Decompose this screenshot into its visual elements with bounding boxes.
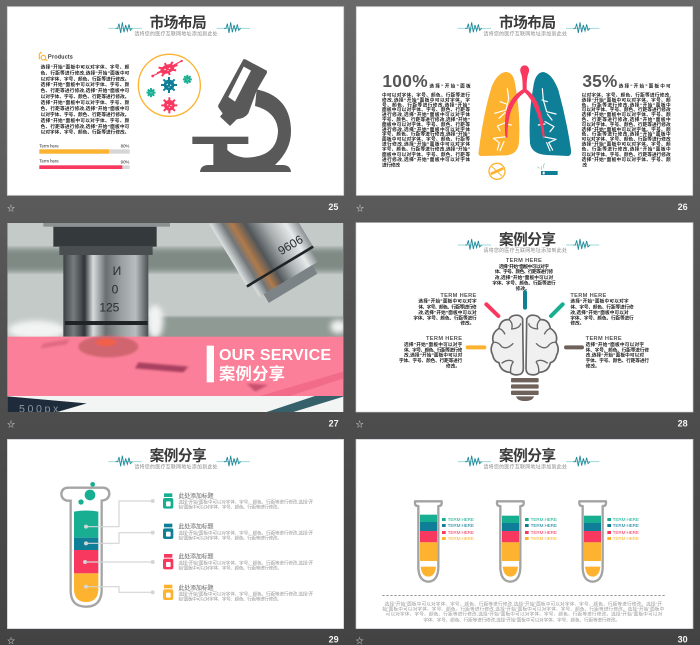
- icon: star: ☆: [356, 420, 364, 429]
- lower-right term: 体、字号、颜色、行距等进行修: [586, 346, 649, 353]
- section title: OUR SERVICE: [219, 347, 331, 364]
- tube 1 with legend: [415, 501, 474, 582]
- top term: 改,选择“开始”面板中可以对: [495, 274, 553, 281]
- upper-left term: 改,选择“开始”面板中可以对: [418, 309, 477, 316]
- left paragraph: 面板中可以对字体、字号、颜色、行距等: [382, 136, 470, 143]
- top term: TERM HERE: [506, 258, 542, 264]
- left paragraph: [382, 82, 471, 169]
- progress bar 80%: Term here: [39, 144, 59, 149]
- progress bar 80%: [39, 144, 130, 154]
- icon: star: ☆: [7, 420, 15, 429]
- progress bar 90%: [39, 159, 130, 169]
- lower-right term: 字体、字号、颜色、行距等进行: [586, 357, 649, 364]
- right paragraph: 色、行距等进行修改,选择“开始”面板中: [582, 131, 671, 138]
- upper-right term: [570, 293, 634, 327]
- upper-left term: [413, 293, 477, 327]
- right paragraph: 可以对字体、字号、颜色、行距等进行修改: [582, 121, 671, 128]
- lower-left term: 改,选择“开始”面板中可以对: [404, 352, 463, 359]
- heartbeat line right: [566, 22, 599, 33]
- body paragraph: 以对字体、字号、颜色、行距等进行修改。: [41, 111, 129, 118]
- page number: 25: [328, 202, 338, 212]
- tube 2 with legend: TERM HERE: [531, 536, 557, 541]
- body paragraph: 色、行距等进行修改,选择“开始”面板中可: [41, 69, 130, 76]
- body paragraph: 选择“开始”面板中可以对字体、字号、颜: [41, 99, 130, 106]
- subtitle: 请将您的医疗互联网地址添加到此处: [483, 247, 567, 254]
- progress bar 90%: 90%: [121, 160, 129, 165]
- page number: 26: [678, 202, 688, 212]
- row 2: [163, 522, 314, 542]
- illustration: lungs: [478, 65, 571, 156]
- upper-left term: 体、字号、颜色、行距等进行修: [418, 303, 477, 310]
- bottom paragraph: [382, 601, 665, 624]
- slide 26: lungs: [356, 7, 693, 213]
- page number: 28: [678, 418, 688, 428]
- illustration: brain: [491, 315, 558, 375]
- page number: 27: [329, 418, 339, 428]
- slide 30: three test tubes: [356, 439, 693, 645]
- stat 100%: 100%: [382, 71, 428, 91]
- slide 28: brain bulb: [356, 223, 693, 429]
- tube 3 with legend: TERM HERE: [613, 536, 639, 541]
- lower-left term: 选择“开始”面板中可以对字: [404, 341, 463, 348]
- row 1: [163, 492, 314, 511]
- row 4: [163, 584, 314, 603]
- right paragraph: 选择“开始”面板中可以对字体、字号、颜: [582, 141, 671, 148]
- body paragraph: 色、行距等进行修改,选择“开始”面板中可: [41, 87, 130, 94]
- slide 25: market layout with microscope: [7, 7, 344, 213]
- heartbeat line left: [458, 239, 491, 250]
- lower-right term: [586, 336, 649, 369]
- title: 案例分享: [150, 447, 207, 465]
- dashed divider with arrows: [382, 594, 665, 596]
- row 3: [163, 553, 314, 572]
- illustration: bulb base: [511, 378, 539, 401]
- top term: 字体、字号、颜色、行距等进行: [492, 279, 556, 286]
- title: 市场布局: [150, 14, 207, 32]
- left paragraph: 进行修改,选择“开始”面板中可以对字体: [382, 126, 470, 133]
- ray bars: [468, 292, 582, 347]
- tube 2 with legend: [497, 501, 557, 582]
- left paragraph: 中可以对字体、字号、颜色、行距等进行: [382, 92, 470, 99]
- tube 1 with legend: TERM HERE: [448, 523, 474, 528]
- row 2: 始”面板中可以对字体、字号、颜色、行距等进行修改。: [178, 535, 282, 542]
- row 2: 此处添加标题: [178, 522, 214, 530]
- lower-right term: 选择“开始”面板中可以对字: [586, 341, 644, 348]
- photo: microscope objectives: 0: [112, 282, 119, 296]
- tube 1 with legend: TERM HERE: [448, 536, 474, 541]
- bottom paragraph: 可以对字体、字号、颜色、行距等进行修改,选择“开始”面板中可以对字体、字号、颜色、行距等进行修改。选择“开始”面板中可以对: [386, 611, 663, 618]
- bottom paragraph: 选择“开始”面板中可以对字体、字号、颜色、行距等进行修改,选择“开始”面板中可以对字体、字号、颜色、行距等进行修改。选择“开: [385, 601, 662, 608]
- left paragraph: 面板中可以对字体、字号、颜色、行距等: [382, 121, 470, 128]
- progress bar 90%: Term here: [39, 159, 59, 164]
- section title: 案例分享: [219, 365, 285, 384]
- products heading: Products: [48, 54, 73, 60]
- row 2: 选择“开始”面板中可以对字体、字号、颜色、行距等进行修改,选择“开: [178, 529, 314, 536]
- body paragraph: 色、行距等进行修改,选择“开始”面板中可: [41, 105, 130, 112]
- bottom paragraph: 字体、字号、颜色、行距等进行修改,选择“开始”面板中可以对字体、字号、颜色、行距等进行修改。: [423, 617, 620, 624]
- icon: star: ☆: [7, 204, 15, 213]
- row 1: 始”面板中可以对字体、字号、颜色、行距等进行修改。: [178, 504, 282, 511]
- lower-left term: [399, 336, 463, 369]
- left paragraph: 面板中可以对字体、字号、颜色、行距等: [382, 106, 470, 113]
- top term: 修改。: [516, 285, 530, 292]
- left paragraph: 号、颜色、行距等进行修改,选择“开始”: [382, 101, 470, 108]
- body paragraph: 以对字体、字号、颜色、行距等进行修改。: [41, 75, 129, 82]
- tube 2 with legend: TERM HERE: [531, 517, 557, 522]
- row 1: 选择“开始”面板中可以对字体、字号、颜色、行距等进行修改,选择“开: [178, 498, 314, 505]
- left paragraph: 字号、颜色、行距等进行修改,选择“开始”: [382, 146, 470, 153]
- upper-left term: TERM HERE: [440, 293, 477, 299]
- upper-right term: 字体、字号、颜色、行距等进行: [570, 314, 634, 321]
- left paragraph: 进行修改: [382, 162, 400, 169]
- row 4: 始”面板中可以对字体、字号、颜色、行距等进行修改。: [178, 596, 282, 603]
- body paragraph: 色、行距等进行修改,选择“开始”面板中可: [41, 123, 130, 130]
- body paragraph: 选择“开始”面板中可以对字体、字号、颜: [41, 81, 130, 88]
- progress bar 80%: 80%: [121, 144, 129, 149]
- body paragraph: 选择“开始”面板中可以对字体、字号、颜: [41, 63, 130, 70]
- tube 3 with legend: TERM HERE: [613, 523, 639, 528]
- row 4: 此处添加标题: [178, 584, 214, 592]
- subtitle: 请将您的医疗互联网地址添加到此处: [483, 30, 567, 37]
- slide 29: single test tube: [7, 439, 344, 645]
- lower-right term: 修改。: [586, 362, 600, 369]
- upper-right term: 选择“开始”面板中可以对字: [570, 298, 629, 305]
- subtitle: 请将您的医疗互联网地址添加到此处: [134, 464, 218, 471]
- tube 3 with legend: TERM HERE: [613, 530, 639, 535]
- right paragraph: 以对字体、字号、颜色、行距等进行修改,: [582, 92, 671, 99]
- tube 2 with legend: TERM HERE: [531, 523, 557, 528]
- right paragraph: 改: [582, 162, 587, 169]
- right paragraph: [582, 82, 671, 169]
- left paragraph: 进行修改,选择“开始”面板中可以对字体: [382, 141, 470, 148]
- section title: [219, 347, 331, 384]
- tube 1 with legend: TERM HERE: [448, 517, 474, 522]
- lower-left term: 修改。: [446, 362, 460, 369]
- upper-left term: 字体、字号、颜色、行距等进行: [413, 314, 477, 321]
- left paragraph: 修改,选择“开始”面板中可以对字体、字: [382, 96, 470, 103]
- title: 市场布局: [499, 14, 556, 32]
- tube 1 with legend: TERM HERE: [448, 530, 474, 535]
- lower-left term: 字体、字号、颜色、行距等进行: [399, 357, 463, 364]
- right paragraph: 选择“开始”面板中可以对字体、字号、颜: [582, 111, 671, 118]
- icon: virus circle: [138, 54, 200, 116]
- right paragraph: 选择“开始”面板中可以对字体、字号、颜: [582, 96, 671, 103]
- photo: microscope objectives: [7, 223, 344, 412]
- upper-right term: 改,选择“开始”面板中可以对: [570, 309, 629, 316]
- heartbeat line left: [458, 456, 491, 466]
- top term: 体、字号、颜色、行距等进行修: [495, 268, 553, 275]
- right paragraph: 选择“开始”面板中可以对字体、字号、颜: [582, 156, 671, 163]
- illustration: test tube: [61, 482, 109, 607]
- right paragraph: 可以对字体、字号、颜色、行距等进行修改: [582, 136, 671, 143]
- upper-left term: 修改。: [460, 320, 474, 327]
- body paragraph: 选择“开始”面板中可以对字体、字号、颜: [41, 117, 130, 124]
- top term: 选择“开始”面板中可以对字: [499, 263, 549, 270]
- heartbeat line right: [566, 456, 599, 466]
- upper-right term: 体、字号、颜色、行距等进行修: [570, 303, 634, 310]
- tube 2 with legend: TERM HERE: [531, 530, 557, 535]
- white accent bar: [207, 346, 214, 382]
- heartbeat line left: [108, 456, 142, 466]
- tube 3 with legend: [579, 501, 639, 582]
- row 4: 选择“开始”面板中可以对字体、字号、颜色、行距等进行修改,选择“开: [178, 590, 314, 597]
- lower-right term: TERM HERE: [586, 336, 622, 342]
- heartbeat line right: [566, 239, 599, 250]
- icon: star: ☆: [356, 204, 364, 213]
- left paragraph: 选择“开始”面板: [429, 82, 471, 89]
- heartbeat line left: [458, 22, 491, 33]
- right paragraph: 色、行距等进行修改,选择“开始”面板中: [582, 146, 671, 153]
- upper-right term: TERM HERE: [570, 293, 607, 299]
- icon: cigarette: [537, 163, 558, 175]
- right paragraph: 色、行距等进行修改,选择“开始”面板中: [582, 116, 671, 123]
- lower-left term: TERM HERE: [426, 336, 462, 342]
- left paragraph: 面板中可以对字体、字号、颜色、行距等: [382, 151, 470, 158]
- right paragraph: 选择“开始”面板中可: [619, 82, 671, 89]
- upper-left term: 选择“开始”面板中可以对字: [418, 298, 477, 305]
- right paragraph: 选择“开始”面板中可以对字体、字号、颜: [582, 126, 671, 133]
- subtitle: 请将您的医疗互联网地址添加到此处: [134, 30, 218, 37]
- tube 3 with legend: TERM HERE: [613, 517, 639, 522]
- right paragraph: 色、行距等进行修改,选择“开始”面板中: [582, 101, 671, 108]
- left paragraph: 进行修改,选择“开始”面板中可以对字体: [382, 111, 470, 118]
- photo: microscope objectives: 500px: [19, 403, 59, 415]
- title: 案例分享: [499, 230, 556, 248]
- right paragraph: 可以对字体、字号、颜色、行距等进行修改: [582, 106, 671, 113]
- body paragraph: 以对字体、字号、颜色、行距等进行修改。: [41, 128, 129, 135]
- icon: products magnifier: [39, 52, 47, 61]
- body paragraph: 以对字体、字号、颜色、行距等进行修改。: [41, 93, 129, 100]
- row 3: 此处添加标题: [178, 553, 214, 561]
- photo: microscope objectives: 125: [99, 301, 120, 315]
- row 3: 始”面板中可以对字体、字号、颜色、行距等进行修改。: [178, 565, 282, 572]
- left paragraph: 进行修改,选择“开始”面板中可以对字体: [382, 156, 470, 163]
- slide 27: our service photo: [7, 223, 344, 428]
- title: 案例分享: [499, 447, 556, 465]
- top term: [492, 258, 556, 292]
- left paragraph: 字号、颜色、行距等进行修改,选择“开始”: [382, 116, 470, 123]
- icon: no smoking: [489, 163, 505, 179]
- heartbeat line left: [108, 22, 142, 33]
- heartbeat line right: [217, 22, 250, 33]
- page number: 29: [329, 635, 339, 645]
- row 3: 选择“开始”面板中可以对字体、字号、颜色、行距等进行修改,选择“开: [178, 559, 314, 566]
- left paragraph: 字号、颜色、行距等进行修改,选择“开始”: [382, 131, 470, 138]
- icon: microscope: [192, 59, 291, 172]
- heartbeat line right: [217, 456, 250, 466]
- bottom paragraph: 始”面板中可以对字体、字号、颜色、行距等进行修改,选择“开始”面板中可以对字体、字号、颜色、行距等进行修改。选择“开始”面板中: [382, 606, 665, 613]
- photo: microscope objectives: 9606: [275, 232, 306, 258]
- lower-right term: 改,选择“开始”面板中可以对: [586, 352, 644, 359]
- right paragraph: 可以对字体、字号、颜色、行距等进行修改: [582, 151, 671, 158]
- upper-right term: 修改。: [570, 320, 584, 327]
- subtitle: 请将您的医疗互联网地址添加到此处: [483, 464, 567, 471]
- pink banner: [7, 336, 343, 396]
- photo: microscope objectives: И: [113, 264, 121, 278]
- stat 35%: 35%: [582, 71, 617, 91]
- connector lines: [83, 499, 155, 594]
- page number: 30: [678, 635, 688, 645]
- row 1: 此处添加标题: [178, 492, 214, 500]
- lower-left term: 体、字号、颜色、行距等进行修: [404, 346, 463, 353]
- body paragraph: [41, 63, 130, 135]
